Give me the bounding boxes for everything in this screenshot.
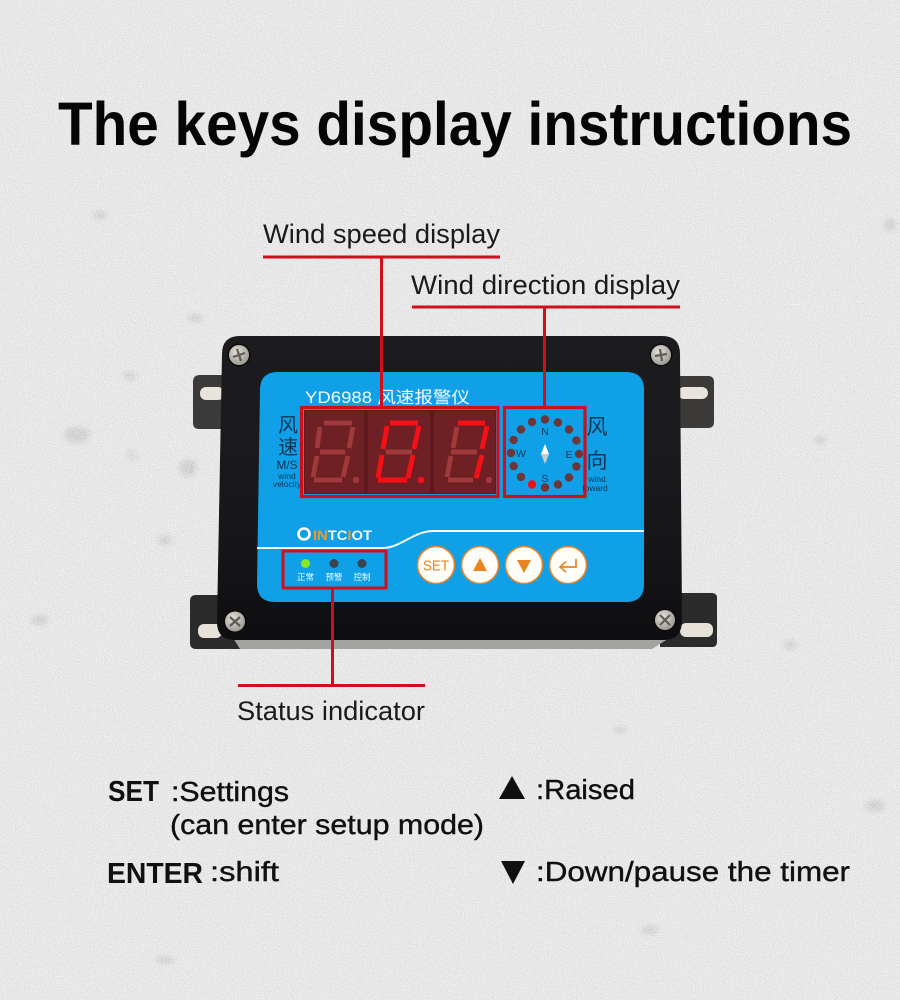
left label: wind velocity: wind bbox=[277, 471, 296, 481]
key legend: down arrow: :Down/pause the timer bbox=[536, 856, 850, 887]
mounting ear: top left bbox=[193, 375, 226, 429]
screw: bottom left bbox=[224, 610, 246, 633]
status LEDs: 正常 bbox=[297, 572, 314, 582]
left label: wind velocity: 风 bbox=[278, 415, 298, 437]
panel curved white line bbox=[257, 531, 644, 548]
status LEDs bbox=[297, 559, 371, 582]
enclosure lower edge bbox=[228, 630, 668, 649]
button: enter bbox=[550, 546, 586, 584]
blue front panel bbox=[257, 372, 644, 602]
left label: wind velocity: 速 bbox=[278, 436, 298, 459]
LED display bbox=[304, 410, 496, 494]
compass letters: N bbox=[541, 426, 549, 438]
compass ring of LEDs bbox=[507, 415, 583, 492]
right label: wind toward: wind bbox=[587, 474, 606, 484]
right label: wind toward: toward bbox=[582, 483, 608, 493]
status LEDs: 控制 bbox=[353, 572, 371, 582]
callout: wind direction display: Wind direction display bbox=[411, 270, 681, 300]
mounting ear: bottom left bbox=[190, 595, 240, 649]
device: wind speed alarm controller bbox=[190, 336, 717, 649]
screw: bottom right bbox=[654, 608, 676, 632]
button: SET: SET bbox=[423, 558, 449, 574]
status LEDs: 预警 bbox=[325, 572, 343, 582]
right label: wind toward: 向 bbox=[586, 450, 608, 473]
key legend: SET: (can enter setup mode) bbox=[170, 809, 484, 840]
compass needle bbox=[541, 444, 549, 464]
panel heading: YD6988 风速报警仪 bbox=[305, 388, 470, 407]
title: The keys display instructions bbox=[58, 90, 852, 158]
callout: status indicator: Status indicator bbox=[237, 696, 425, 726]
button: SET bbox=[418, 546, 454, 584]
callout: wind speed display bbox=[263, 219, 500, 496]
mounting ear: top right bbox=[676, 376, 714, 428]
callout: wind speed display: Wind speed display bbox=[263, 219, 500, 249]
compass letters: E bbox=[565, 449, 573, 461]
left label: wind velocity: velocity bbox=[273, 479, 302, 489]
screw: top right bbox=[650, 344, 672, 366]
enclosure body bbox=[217, 336, 682, 640]
right label: wind toward bbox=[582, 416, 608, 493]
compass letters bbox=[516, 426, 573, 485]
key legend: ENTER: :shift bbox=[210, 856, 279, 887]
key legend: ENTER: ENTER bbox=[107, 858, 203, 890]
dim digit segments 8 bbox=[313, 423, 477, 480]
callout: wind direction display bbox=[411, 270, 681, 496]
mounting ear: bottom right bbox=[660, 593, 717, 647]
callout: status indicator bbox=[237, 551, 425, 726]
key legend: up arrow: :Raised bbox=[536, 774, 635, 805]
button: up bbox=[462, 546, 498, 584]
left label: wind velocity bbox=[273, 415, 302, 489]
button: down bbox=[506, 546, 542, 584]
key legend: ENTER bbox=[107, 856, 279, 890]
brand logo: INTCIOT bbox=[313, 527, 372, 543]
compass letters: W bbox=[516, 448, 526, 460]
bright digit 7 bbox=[458, 423, 487, 478]
key legend: up arrow bbox=[499, 774, 635, 805]
bright digit 0 bbox=[378, 423, 419, 480]
left label: wind velocity: M/S bbox=[276, 458, 298, 472]
right label: wind toward: 风 bbox=[586, 416, 608, 439]
key legend: SET: :Settings bbox=[171, 776, 289, 807]
decimal dots bbox=[353, 477, 359, 483]
compass letters: S bbox=[541, 473, 549, 485]
key legend: SET: SET bbox=[108, 776, 159, 808]
key legend: SET bbox=[108, 776, 484, 840]
screw: top left bbox=[228, 344, 250, 366]
